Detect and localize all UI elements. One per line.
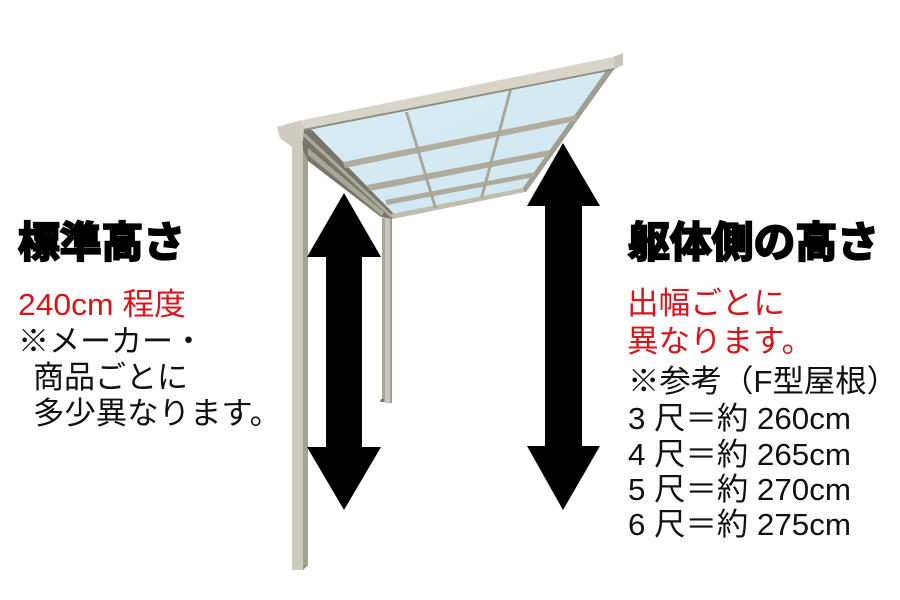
rear post and downpipe [380,218,392,403]
arrow: building side height [527,143,600,510]
heading: building side height: 躯体側の高さ [628,219,879,266]
side frame left [302,128,394,219]
reference values: 3 尺＝約 260cm [628,401,851,436]
cross bars [343,115,577,168]
heading: standard height: 標準高さ [18,219,185,266]
text block: building side height [627,286,898,542]
text block: standard height [18,287,281,431]
text block: building side height: 5 尺＝約 270cm [628,472,851,507]
text block: building side height: 異なります。 [627,324,813,359]
red note: 出幅ごとに [627,286,785,321]
roof [277,53,623,219]
front frame [391,188,525,219]
text block: building side height: 4 尺＝約 265cm [628,437,851,472]
text block: building side height: 6 尺＝約 275cm [628,507,851,542]
arrow: standard height [307,193,381,510]
front post [292,130,308,570]
red value: 240cm 程度 [18,287,186,322]
side frame right [520,68,615,192]
text block: standard height: 商品ごとに [33,360,188,395]
text block: standard height: 多少異なります。 [33,396,281,431]
glass panel [306,66,610,215]
maker note: ※メーカー・ [18,324,204,359]
beam end caps [277,120,304,147]
reference heading: ※参考（F型屋根） [628,364,898,399]
front beam [303,57,615,129]
